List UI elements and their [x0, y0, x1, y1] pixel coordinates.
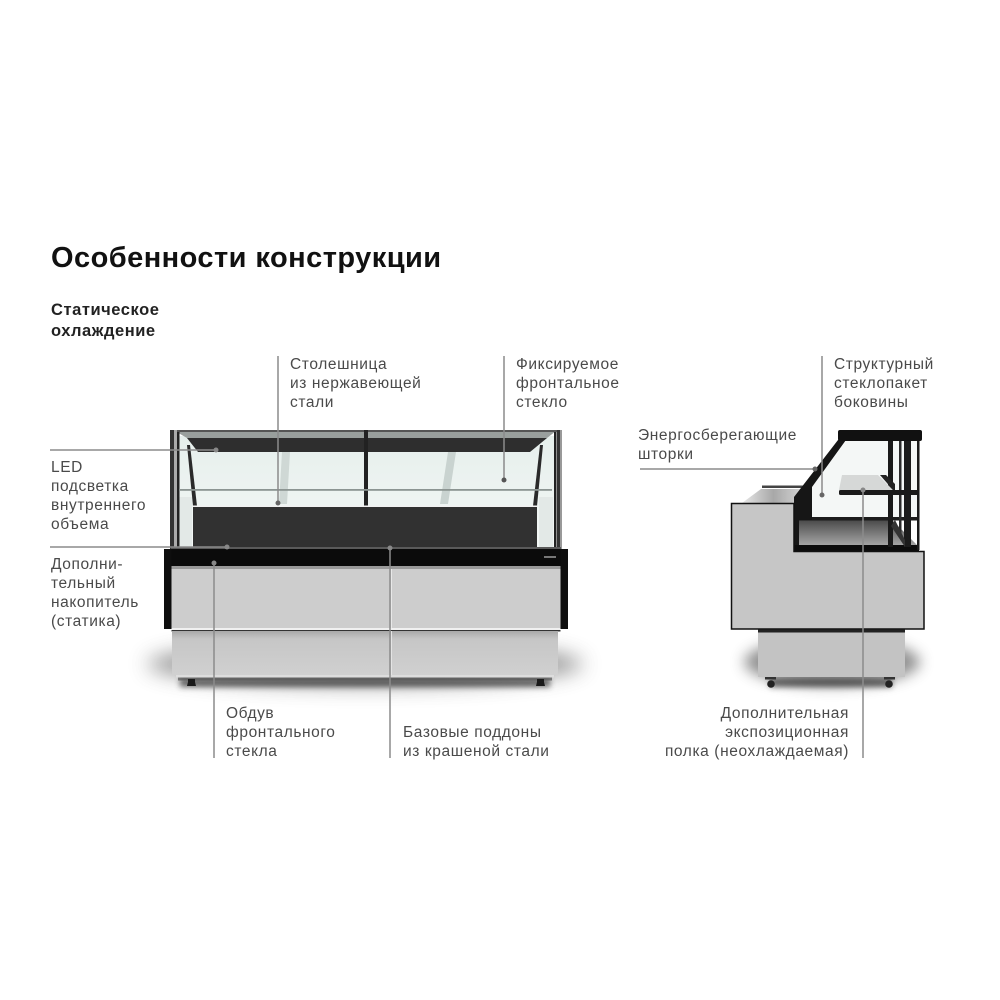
counter top — [171, 547, 561, 550]
casters — [765, 677, 776, 680]
callout dots — [212, 448, 866, 566]
line: worktop — [277, 356, 279, 503]
line: LED — [50, 449, 216, 451]
label: LED lighting: внутреннего — [51, 497, 146, 514]
label: extra shelf: полка (неохлаждаемая) — [665, 743, 849, 760]
upper shelf — [839, 475, 893, 490]
line: front glass airflow — [213, 563, 215, 758]
label: structural glass unit: стеклопакет — [834, 375, 928, 392]
side unit floor shadow — [744, 638, 920, 686]
front view display case — [147, 430, 583, 687]
label: extra storage: накопитель — [51, 594, 139, 611]
line: extra shelf — [862, 490, 864, 758]
label: extra storage: тельный — [51, 575, 116, 592]
subtitle: охлаждение — [51, 322, 156, 340]
label: worktop: стали — [290, 394, 334, 411]
display floor — [799, 520, 918, 546]
line: structural glass — [821, 356, 823, 495]
black front strip — [164, 549, 568, 566]
front unit floor shadow — [147, 642, 583, 686]
label: front glass airflow: стекла — [226, 743, 278, 760]
label: extra storage: (статика) — [51, 613, 121, 630]
side unit contact shadow — [770, 678, 892, 687]
label: front glass: Фиксируемое — [516, 356, 619, 373]
side body — [732, 504, 924, 629]
side view display case — [732, 430, 924, 688]
label: extra shelf — [665, 705, 849, 760]
label: extra storage: Дополни- — [51, 556, 123, 573]
glass shelf — [179, 489, 552, 491]
subtitle: Статическое — [51, 301, 159, 319]
label: energy-saving curtains: шторки — [638, 446, 694, 463]
label: front glass — [516, 356, 620, 411]
label: base trays — [403, 724, 550, 760]
label: worktop: Столешница — [290, 356, 387, 373]
label: front glass airflow: Обдув — [226, 705, 274, 722]
label: LED lighting: подсветка — [51, 478, 129, 495]
label: structural glass unit: боковины — [834, 394, 908, 411]
label: base trays: из крашеной стали — [403, 743, 550, 760]
upper front panel — [172, 566, 560, 628]
front unit contact shadow — [180, 678, 550, 687]
label: energy-saving curtains — [638, 427, 797, 463]
label: front glass airflow — [226, 705, 336, 760]
label: extra shelf: Дополнительная — [721, 705, 849, 722]
line: extra storage — [50, 546, 227, 548]
label: extra shelf: экспозиционная — [725, 724, 849, 741]
base panel — [172, 631, 558, 675]
label: structural glass unit — [834, 356, 934, 411]
label: base trays: Базовые поддоны — [403, 724, 542, 741]
label: worktop: из нержавеющей — [290, 375, 421, 392]
subtitle — [51, 301, 159, 340]
label: front glass airflow: фронтального — [226, 724, 336, 741]
feet — [187, 679, 196, 686]
label: energy-saving curtains: Энергосберегающие — [638, 427, 797, 444]
line: energy curtains — [640, 468, 815, 470]
display case frame — [794, 440, 846, 546]
label: extra storage — [51, 556, 139, 630]
label: front glass: стекло — [516, 394, 568, 411]
steel worktop — [742, 489, 805, 503]
rear posts — [888, 441, 893, 547]
side glass — [812, 441, 920, 518]
label: LED lighting: объема — [51, 516, 109, 533]
glass display area — [176, 436, 556, 550]
pedestal — [758, 630, 905, 677]
label: LED lighting — [51, 459, 146, 533]
label: worktop — [290, 356, 421, 411]
top canopy — [187, 438, 547, 452]
label: front glass: фронтальное — [516, 375, 620, 392]
line: base trays — [389, 548, 391, 758]
label: LED lighting: LED — [51, 459, 83, 476]
title: Особенности конструкции — [51, 242, 442, 274]
callout lines — [50, 356, 863, 758]
back panel — [193, 507, 537, 550]
side posts — [170, 430, 174, 550]
label: structural glass unit: Структурный — [834, 356, 934, 373]
line: front glass — [503, 356, 505, 480]
